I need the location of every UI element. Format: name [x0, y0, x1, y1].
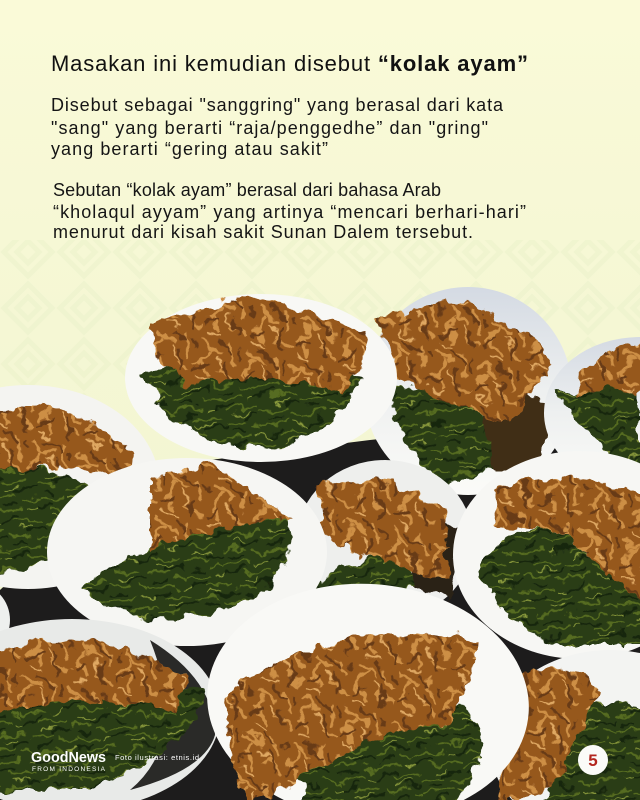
- food: bottom center: [225, 634, 481, 800]
- food: bottom left: [0, 640, 205, 790]
- paragraph: sanggring: Disebut sebagai "sanggring" yang berasal dari kata: [51, 95, 504, 115]
- food: left: [0, 406, 132, 574]
- background pattern: [0, 240, 640, 400]
- food: right middle: [478, 479, 640, 645]
- food: center left: [80, 462, 295, 618]
- photo credit: Foto ilustrasi: etnis.id: [115, 753, 199, 762]
- food: bottom right: [495, 667, 640, 800]
- plate shadow: bottom left: [130, 640, 215, 790]
- logo: GoodNews: FROM INDONESIA: [32, 766, 106, 773]
- paragraph: sanggring: [51, 95, 504, 159]
- paragraph: kolak ayam origin: Sebutan “kolak ayam” berasal dari bahasa Arab: [53, 180, 441, 200]
- logo: GoodNews: GoodNews: [31, 750, 106, 766]
- plate: far left sliver: [0, 584, 10, 656]
- food: top center: [143, 296, 366, 448]
- plate: bottom center: [199, 573, 537, 800]
- plate: top center: [125, 294, 397, 462]
- plate: bottom left: [0, 619, 220, 800]
- paragraph: kolak ayam origin: “kholaqul ayyam” yang artinya “mencari berhari-hari”: [53, 202, 526, 222]
- paragraph: sanggring: "sang" yang berarti “raja/penggedhe” dan "gring": [51, 118, 488, 138]
- paragraph: kolak ayam origin: menurut dari kisah sakit Sunan Dalem tersebut.: [53, 222, 473, 242]
- plate: center left: [47, 458, 327, 646]
- food: far right: [558, 345, 640, 475]
- plate: far right: [544, 337, 640, 489]
- logo: GoodNews: [31, 750, 106, 773]
- page number badge: 5: [588, 751, 598, 770]
- food: back right: [378, 300, 560, 485]
- heading: Masakan ini kemudian disebut “kolak ayam”: [51, 51, 528, 76]
- plate: left: [0, 385, 160, 589]
- paragraph: kolak ayam origin: [53, 180, 526, 242]
- paragraph: sanggring: yang berarti “gering atau sakit”: [51, 139, 328, 159]
- plate: bottom right: [490, 650, 640, 800]
- plate: middle back: [297, 460, 473, 620]
- table shadow area: [0, 420, 640, 800]
- page number badge: [578, 745, 608, 775]
- plate: right middle: [453, 451, 640, 659]
- plate: back right: [364, 287, 572, 495]
- food: middle back: [305, 478, 462, 600]
